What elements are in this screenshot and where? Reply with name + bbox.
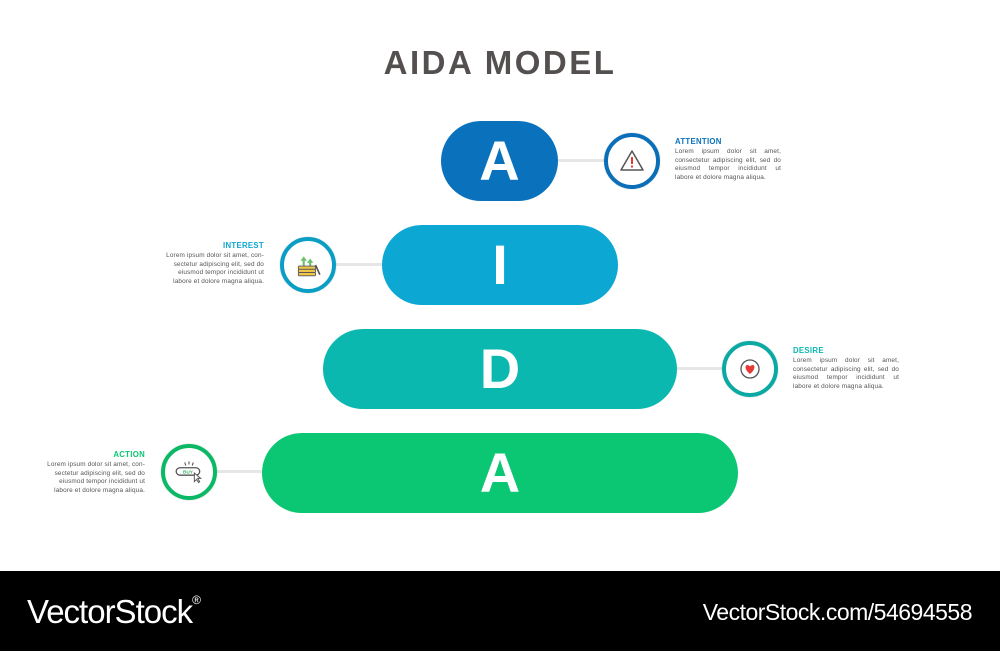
connector lines: [558, 159, 608, 162]
text: action: sectetur adipiscing elit, sed do: [55, 470, 145, 477]
text: action: labore et dolore magna aliqua.: [54, 487, 145, 494]
pill: A attention: A: [479, 129, 520, 192]
text: desire: Lorem ipsum dolor sit amet, consectetur adipiscing elit, sed do eiusmod tempor incididunt ut labore et dolore magna aliqua.: [793, 357, 899, 390]
text: interest: eiusmod tempor incididunt ut: [178, 269, 264, 276]
text: action: ACTION: [113, 450, 145, 459]
text: action: eiusmod tempor incididunt ut: [59, 478, 145, 485]
text: interest: INTEREST: [223, 241, 264, 250]
pill: D desire: [323, 329, 677, 409]
pill: D desire: D: [480, 337, 520, 400]
icon: attention warning: [604, 133, 660, 189]
pill: A action: [262, 433, 738, 513]
icon: action buy button: BUY: [183, 470, 194, 476]
pill: I interest: I: [492, 233, 508, 296]
pill: I interest: [382, 225, 618, 305]
pill: A action: A: [480, 441, 520, 504]
icon: desire heart: [722, 341, 778, 397]
text: action: [47, 450, 145, 494]
text: attention: ATTENTION: [675, 137, 722, 146]
text: interest: labore et dolore magna aliqua.: [173, 278, 264, 285]
text: action: Lorem ipsum dolor sit amet, con-: [47, 461, 145, 468]
title: AIDA MODEL: [384, 44, 616, 81]
footer bar: [0, 571, 1000, 651]
text: interest: [166, 241, 264, 285]
text: desire: DESIRE: [793, 346, 824, 355]
icon: action buy button: [161, 444, 217, 500]
icon: interest coins: [280, 237, 336, 293]
text: attention: Lorem ipsum dolor sit amet, consectetur adipiscing elit, sed do eiusmod tempor incididunt ut labore et dolore magna aliqua.: [675, 148, 781, 181]
pill: A attention: [441, 121, 558, 201]
footer brand: VectorStock®: [27, 593, 200, 630]
text: interest: sectetur adipiscing elit, sed do: [174, 261, 264, 268]
footer id: VectorStock.com/54694558: [703, 599, 972, 625]
text: interest: Lorem ipsum dolor sit amet, con-: [166, 252, 264, 259]
